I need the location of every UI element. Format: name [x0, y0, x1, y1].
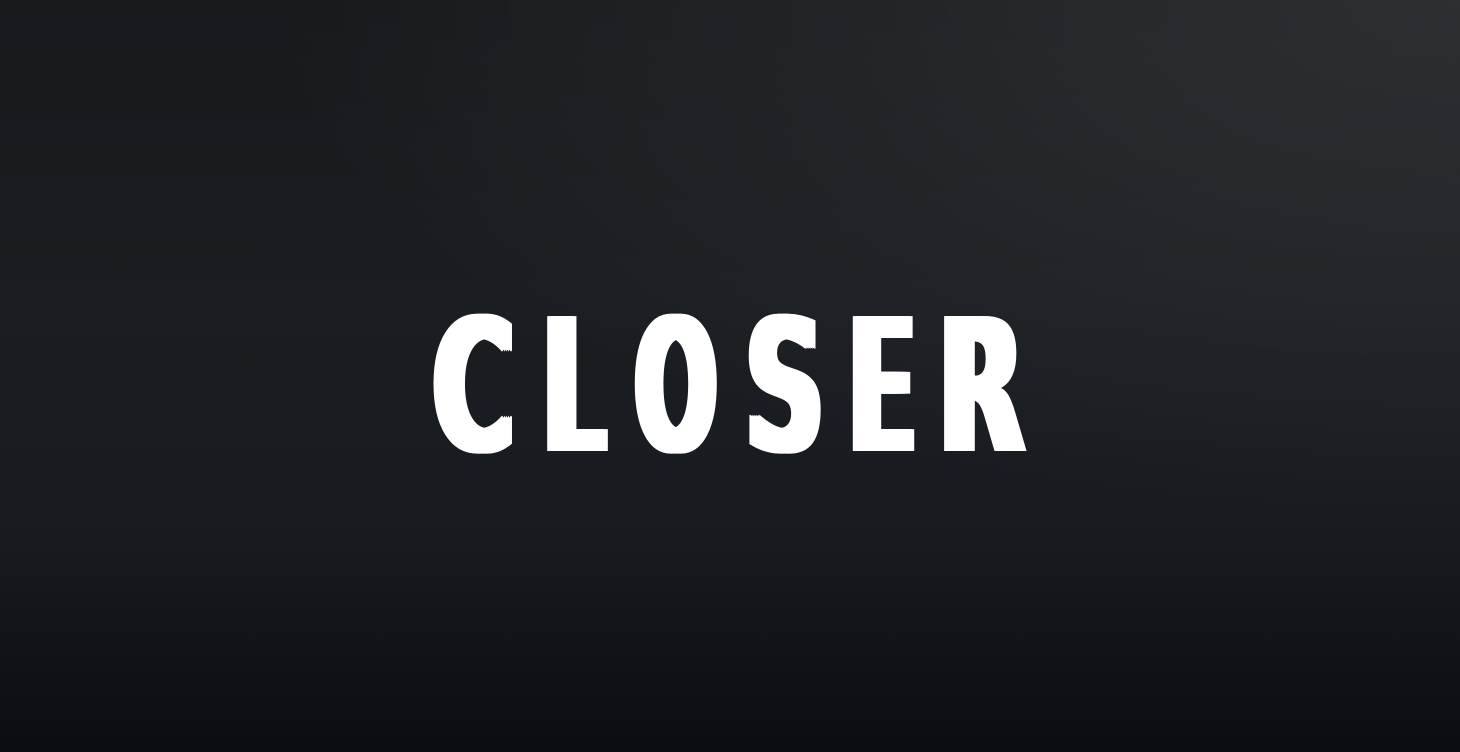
title: C	[433, 279, 514, 495]
title: L	[550, 274, 602, 493]
title: E	[856, 274, 909, 493]
title: R	[939, 279, 1024, 495]
title: S	[746, 279, 823, 495]
title: O	[635, 279, 716, 495]
